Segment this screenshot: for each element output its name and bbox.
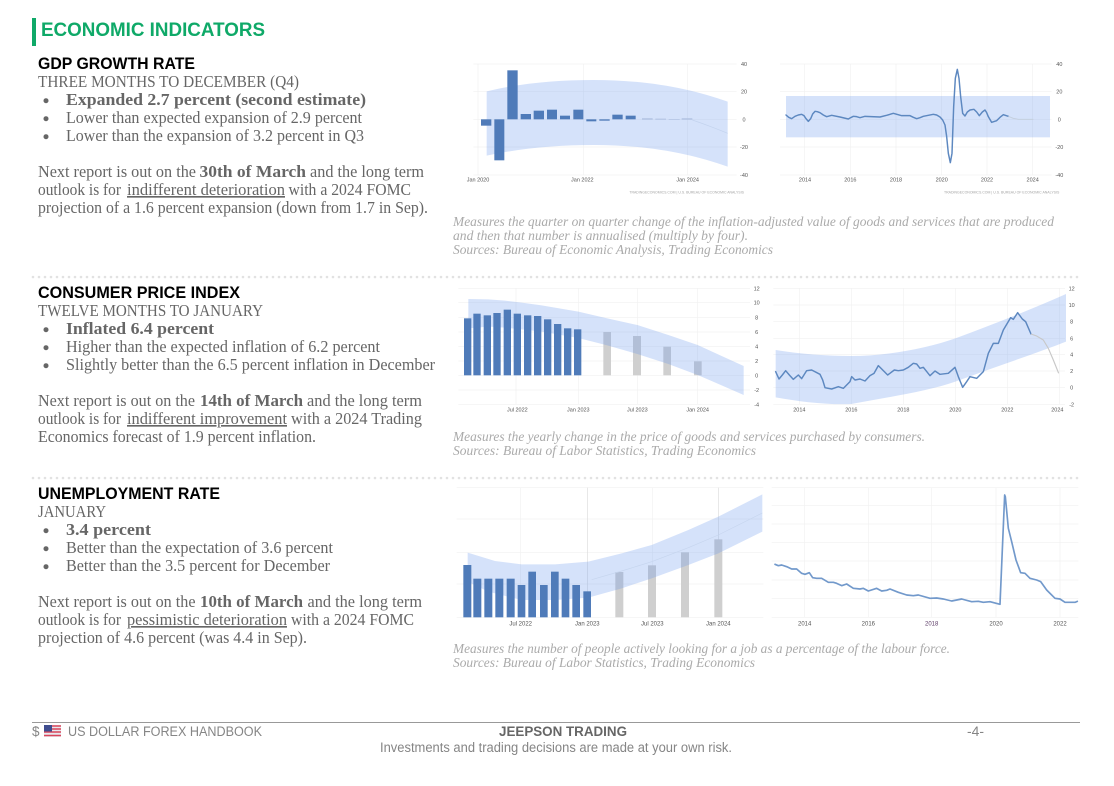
chart: GDP quarterly bars: Jan 2024 [676, 178, 699, 184]
chart: CPI long term line: 2016 [845, 407, 857, 413]
outlook paragraph: outlook is for [38, 409, 121, 428]
outlook paragraph: with a 2024 FOMC [288, 180, 411, 199]
chart: GDP quarterly bars: Jan 2022 [571, 178, 594, 184]
chart: GDP long term line: 2014 [799, 178, 811, 184]
chart: GDP long term line: 40 [1056, 62, 1062, 68]
chart: unemployment long term line: 2022 [1053, 621, 1067, 627]
chart: CPI monthly bars: 10 [754, 301, 760, 307]
footer [32, 722, 1080, 755]
outlook paragraph: 30th of March [200, 162, 306, 181]
outlook paragraph: with a 2024 Trading [291, 409, 422, 428]
chart: unemployment monthly bars: Jul 2022 [509, 621, 533, 627]
bullet list [44, 520, 333, 575]
caption: CPI: Sources: Bureau of Labor Statistics, Trading Economics [453, 443, 756, 458]
heading: consumer price index: CONSUMER PRICE INDEX [38, 284, 240, 302]
outlook paragraph: Next report is out on the [38, 162, 196, 181]
bullet list: Higher than the expected inflation of 6.2 percent [66, 337, 380, 356]
chart: GDP long term line: 20 [1056, 90, 1062, 96]
chart: CPI long term line: 4 [1070, 353, 1073, 359]
outlook paragraph: projection of a 1.6 percent expansion (down from 1.7 in Sep). [38, 198, 428, 217]
caption: CPI [452, 429, 925, 458]
chart: CPI monthly bars: Jan 2024 [686, 407, 709, 413]
outlook paragraph: outlook is for [38, 610, 121, 629]
caption: unemployment: Sources: Bureau of Labor Statistics, Trading Economics [453, 655, 755, 670]
chart: CPI monthly bars: -2 [754, 388, 759, 394]
chart: GDP long term line: 2016 [844, 178, 856, 184]
caption: GDP: Sources: Bureau of Economic Analysis, Trading Economics [453, 242, 773, 257]
footer: $ [32, 724, 40, 739]
chart: CPI long term line: -2 [1069, 402, 1074, 408]
chart: GDP quarterly bars: TRADINGECONOMICS.COM | U.S. BUREAU OF ECONOMIC ANALYSIS [629, 191, 745, 195]
caption: GDP: Measures the quarter on quarter change of the inflation-adjusted value of goods and services that are produced [452, 214, 1054, 229]
chart: CPI long term line: 10 [1069, 303, 1075, 309]
bullet list: 3.4 percent [66, 520, 152, 539]
chart: unemployment monthly bars [457, 488, 763, 627]
chart: GDP quarterly bars: Jan 2020 [467, 178, 489, 184]
chart: CPI monthly bars: 12 [754, 286, 760, 292]
chart: CPI monthly bars: -4 [754, 402, 759, 408]
chart: CPI monthly bars: Jan 2023 [567, 407, 590, 413]
outlook paragraph [38, 391, 422, 446]
chart: CPI monthly bars: 6 [755, 330, 758, 336]
chart: unemployment long term line: 2014 [798, 621, 812, 627]
chart: CPI long term line: 2014 [793, 407, 805, 413]
chart: unemployment monthly bars: Jul 2023 [641, 621, 664, 627]
bullet list: Better than the expectation of 3.6 percent [66, 538, 333, 557]
chart: GDP long term line: -40 [1055, 173, 1063, 179]
chart: CPI long term line: 2024 [1051, 407, 1063, 413]
chart: unemployment long term line: 2020 [989, 621, 1003, 627]
outlook paragraph: 14th of March [200, 391, 303, 410]
bullet list: Slightly better than the 6.5 percent inflation in December [66, 355, 435, 374]
chart: GDP long term line: 0 [1058, 117, 1061, 123]
chart: CPI monthly bars [458, 286, 760, 413]
chart: CPI long term line [773, 286, 1075, 413]
outlook paragraph: and the long term [307, 391, 422, 410]
chart: CPI long term line: 2 [1070, 369, 1073, 375]
chart: unemployment monthly bars: Jan 2024 [706, 621, 731, 627]
icon: US flag [44, 725, 61, 737]
footer: JEEPSON TRADING [499, 724, 627, 739]
outlook paragraph: with a 2024 FOMC [291, 610, 414, 629]
chart: GDP long term line [780, 62, 1063, 195]
bullet list: Better than the 3.5 percent for December [66, 556, 330, 575]
footer: -4- [967, 724, 984, 739]
chart: GDP quarterly bars [467, 62, 748, 195]
chart: GDP quarterly bars: -20 [740, 145, 748, 151]
chart: GDP quarterly bars: -40 [740, 173, 748, 179]
chart: CPI long term line: 2018 [897, 407, 909, 413]
outlook paragraph: and the long term [310, 162, 424, 181]
bullet list [44, 90, 366, 145]
bullet list: Lower than expected expansion of 2.9 percent [66, 108, 362, 127]
panel: unemployment rate text [38, 485, 422, 647]
chart: GDP long term line: -20 [1055, 145, 1063, 151]
heading: unemployment rate: UNEMPLOYMENT RATE [38, 485, 220, 503]
outlook paragraph: indifferent improvement [127, 409, 287, 428]
bullet list: Lower than the expansion of 3.2 percent in Q3 [66, 126, 364, 145]
heading: GDP growth rate: GDP GROWTH RATE [38, 55, 195, 73]
outlook paragraph [38, 162, 428, 217]
title: ECONOMIC INDICATORS [41, 20, 265, 41]
chart: CPI monthly bars: Jul 2023 [627, 407, 648, 413]
subheading: period: THREE MONTHS TO DECEMBER (Q4) [38, 72, 299, 91]
subheading: period: TWELVE MONTHS TO JANUARY [38, 301, 263, 320]
chart: GDP long term line: 2020 [936, 178, 948, 184]
chart: GDP quarterly bars: 20 [741, 90, 747, 96]
chart: GDP quarterly bars: 40 [741, 62, 747, 68]
chart: CPI monthly bars: 2 [755, 359, 758, 365]
chart: GDP quarterly bars: 0 [742, 117, 746, 123]
outlook paragraph: outlook is for [38, 180, 121, 199]
chart: GDP long term line: TRADINGECONOMICS.COM | U.S. BUREAU OF ECONOMIC ANALYSIS [944, 191, 1060, 195]
panel: consumer price index text [38, 284, 435, 446]
caption: CPI: Measures the yearly change in the price of goods and services purchased by consumers. [452, 429, 925, 444]
bullet list [44, 319, 435, 374]
outlook paragraph: Next report is out on the [38, 391, 195, 410]
caption: GDP: and then that number is annualised (multiply by four). [453, 228, 748, 243]
subheading: period: JANUARY [38, 502, 106, 521]
outlook paragraph: indifferent deterioration [127, 180, 285, 199]
panel: GDP growth rate text [38, 55, 428, 217]
chart: CPI long term line: 0 [1070, 386, 1073, 392]
outlook paragraph [38, 592, 422, 647]
chart: GDP long term line: 2022 [981, 178, 993, 184]
outlook paragraph: projection of 4.6 percent (was 4.4 in Sep). [38, 628, 307, 647]
footer: US DOLLAR FOREX HANDBOOK [68, 724, 262, 739]
footer: Investments and trading decisions are made at your own risk. [380, 740, 732, 755]
chart: GDP long term line: 2018 [890, 178, 902, 184]
chart: unemployment long term line: 2016 [862, 621, 876, 627]
caption: unemployment: Measures the number of people actively looking for a job as a percentage of the labour force. [452, 641, 950, 656]
outlook paragraph: pessimistic deterioration [127, 610, 287, 629]
outlook paragraph: Next report is out on the [38, 592, 196, 611]
chart: CPI long term line: 2022 [1001, 407, 1013, 413]
chart: unemployment long term line: 2018 [925, 621, 939, 627]
chart: CPI long term line: 2020 [949, 407, 961, 413]
outlook paragraph: 10th of March [200, 592, 303, 611]
outlook paragraph: Economics forecast of 1.9 percent inflation. [38, 427, 316, 446]
bullet list: Inflated 6.4 percent [66, 319, 215, 338]
chart: unemployment long term line [772, 488, 1078, 627]
chart: GDP long term line: 2024 [1027, 178, 1039, 184]
chart: unemployment monthly bars: Jan 2023 [575, 621, 600, 627]
chart: CPI monthly bars: 0 [755, 373, 758, 379]
chart: CPI monthly bars: 4 [755, 345, 758, 351]
chart: CPI monthly bars: 8 [755, 315, 758, 321]
chart: CPI monthly bars: Jul 2022 [507, 407, 528, 413]
chart: CPI long term line: 6 [1070, 336, 1073, 342]
chart: CPI long term line: 12 [1069, 286, 1075, 292]
caption: GDP [452, 214, 1054, 257]
chart: CPI long term line: 8 [1070, 320, 1073, 326]
outlook paragraph: and the long term [308, 592, 422, 611]
caption: unemployment [452, 641, 950, 670]
bullet list: Expanded 2.7 percent (second estimate) [66, 90, 366, 109]
